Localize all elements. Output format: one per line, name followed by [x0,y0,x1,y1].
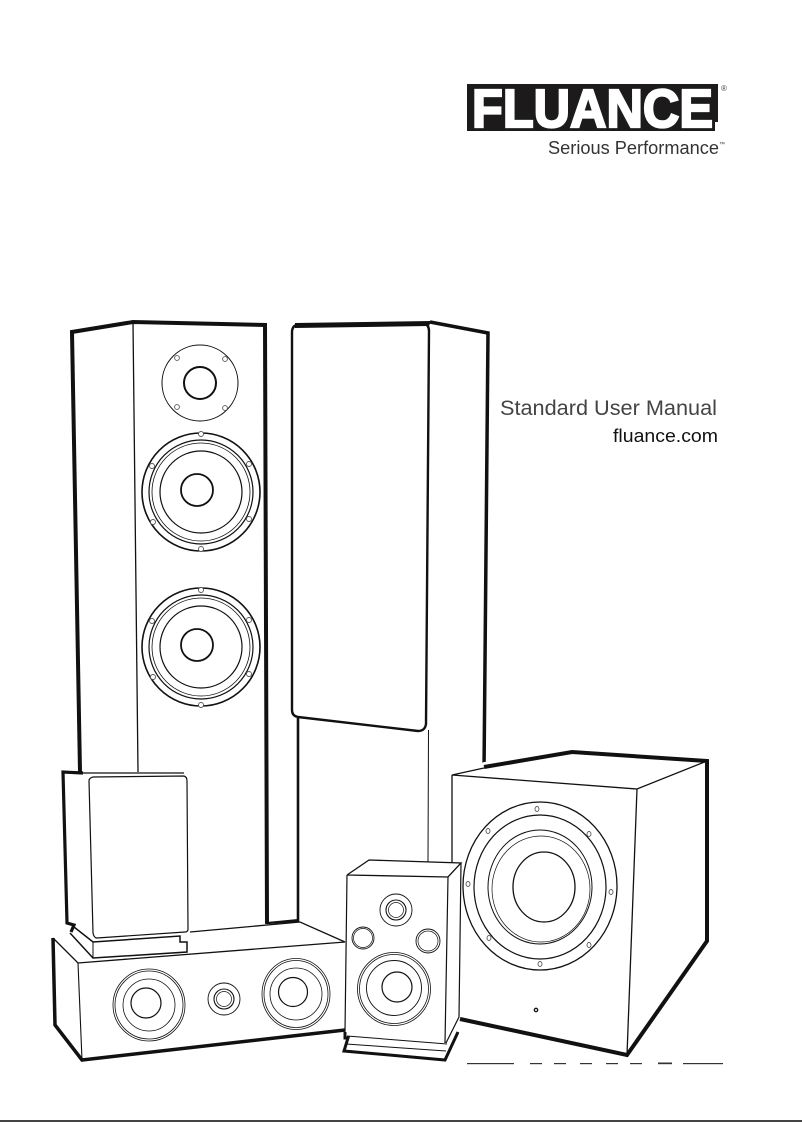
woofer [358,952,430,1026]
page bottom edge [0,1120,802,1122]
subwoofer [452,752,707,1055]
right midrange [416,929,440,953]
power LED [534,1008,538,1012]
left midrange [352,927,374,949]
tweeter [380,894,412,926]
left tower speaker [72,322,267,924]
subwoofer driver [463,802,617,970]
grille panel [292,323,429,731]
trademark mark: ™ [719,141,725,148]
left driver [113,969,185,1041]
manual title: Standard User Manual [500,397,717,420]
right surround speaker [344,860,461,1060]
tagline: Serious Performance [548,138,719,158]
logo: Fluance: ® [721,84,727,93]
clipped logo remnant [467,1062,723,1064]
upper woofer [142,432,260,552]
lower woofer [142,588,260,708]
tweeter [162,345,238,421]
logo: Fluance: FLUANCE [472,79,713,139]
website: fluance.com [613,426,718,446]
right tower speaker [267,321,488,924]
center speaker [53,922,345,1060]
left surround speaker [63,772,189,958]
right driver [262,958,330,1030]
center tweeter [208,983,240,1015]
